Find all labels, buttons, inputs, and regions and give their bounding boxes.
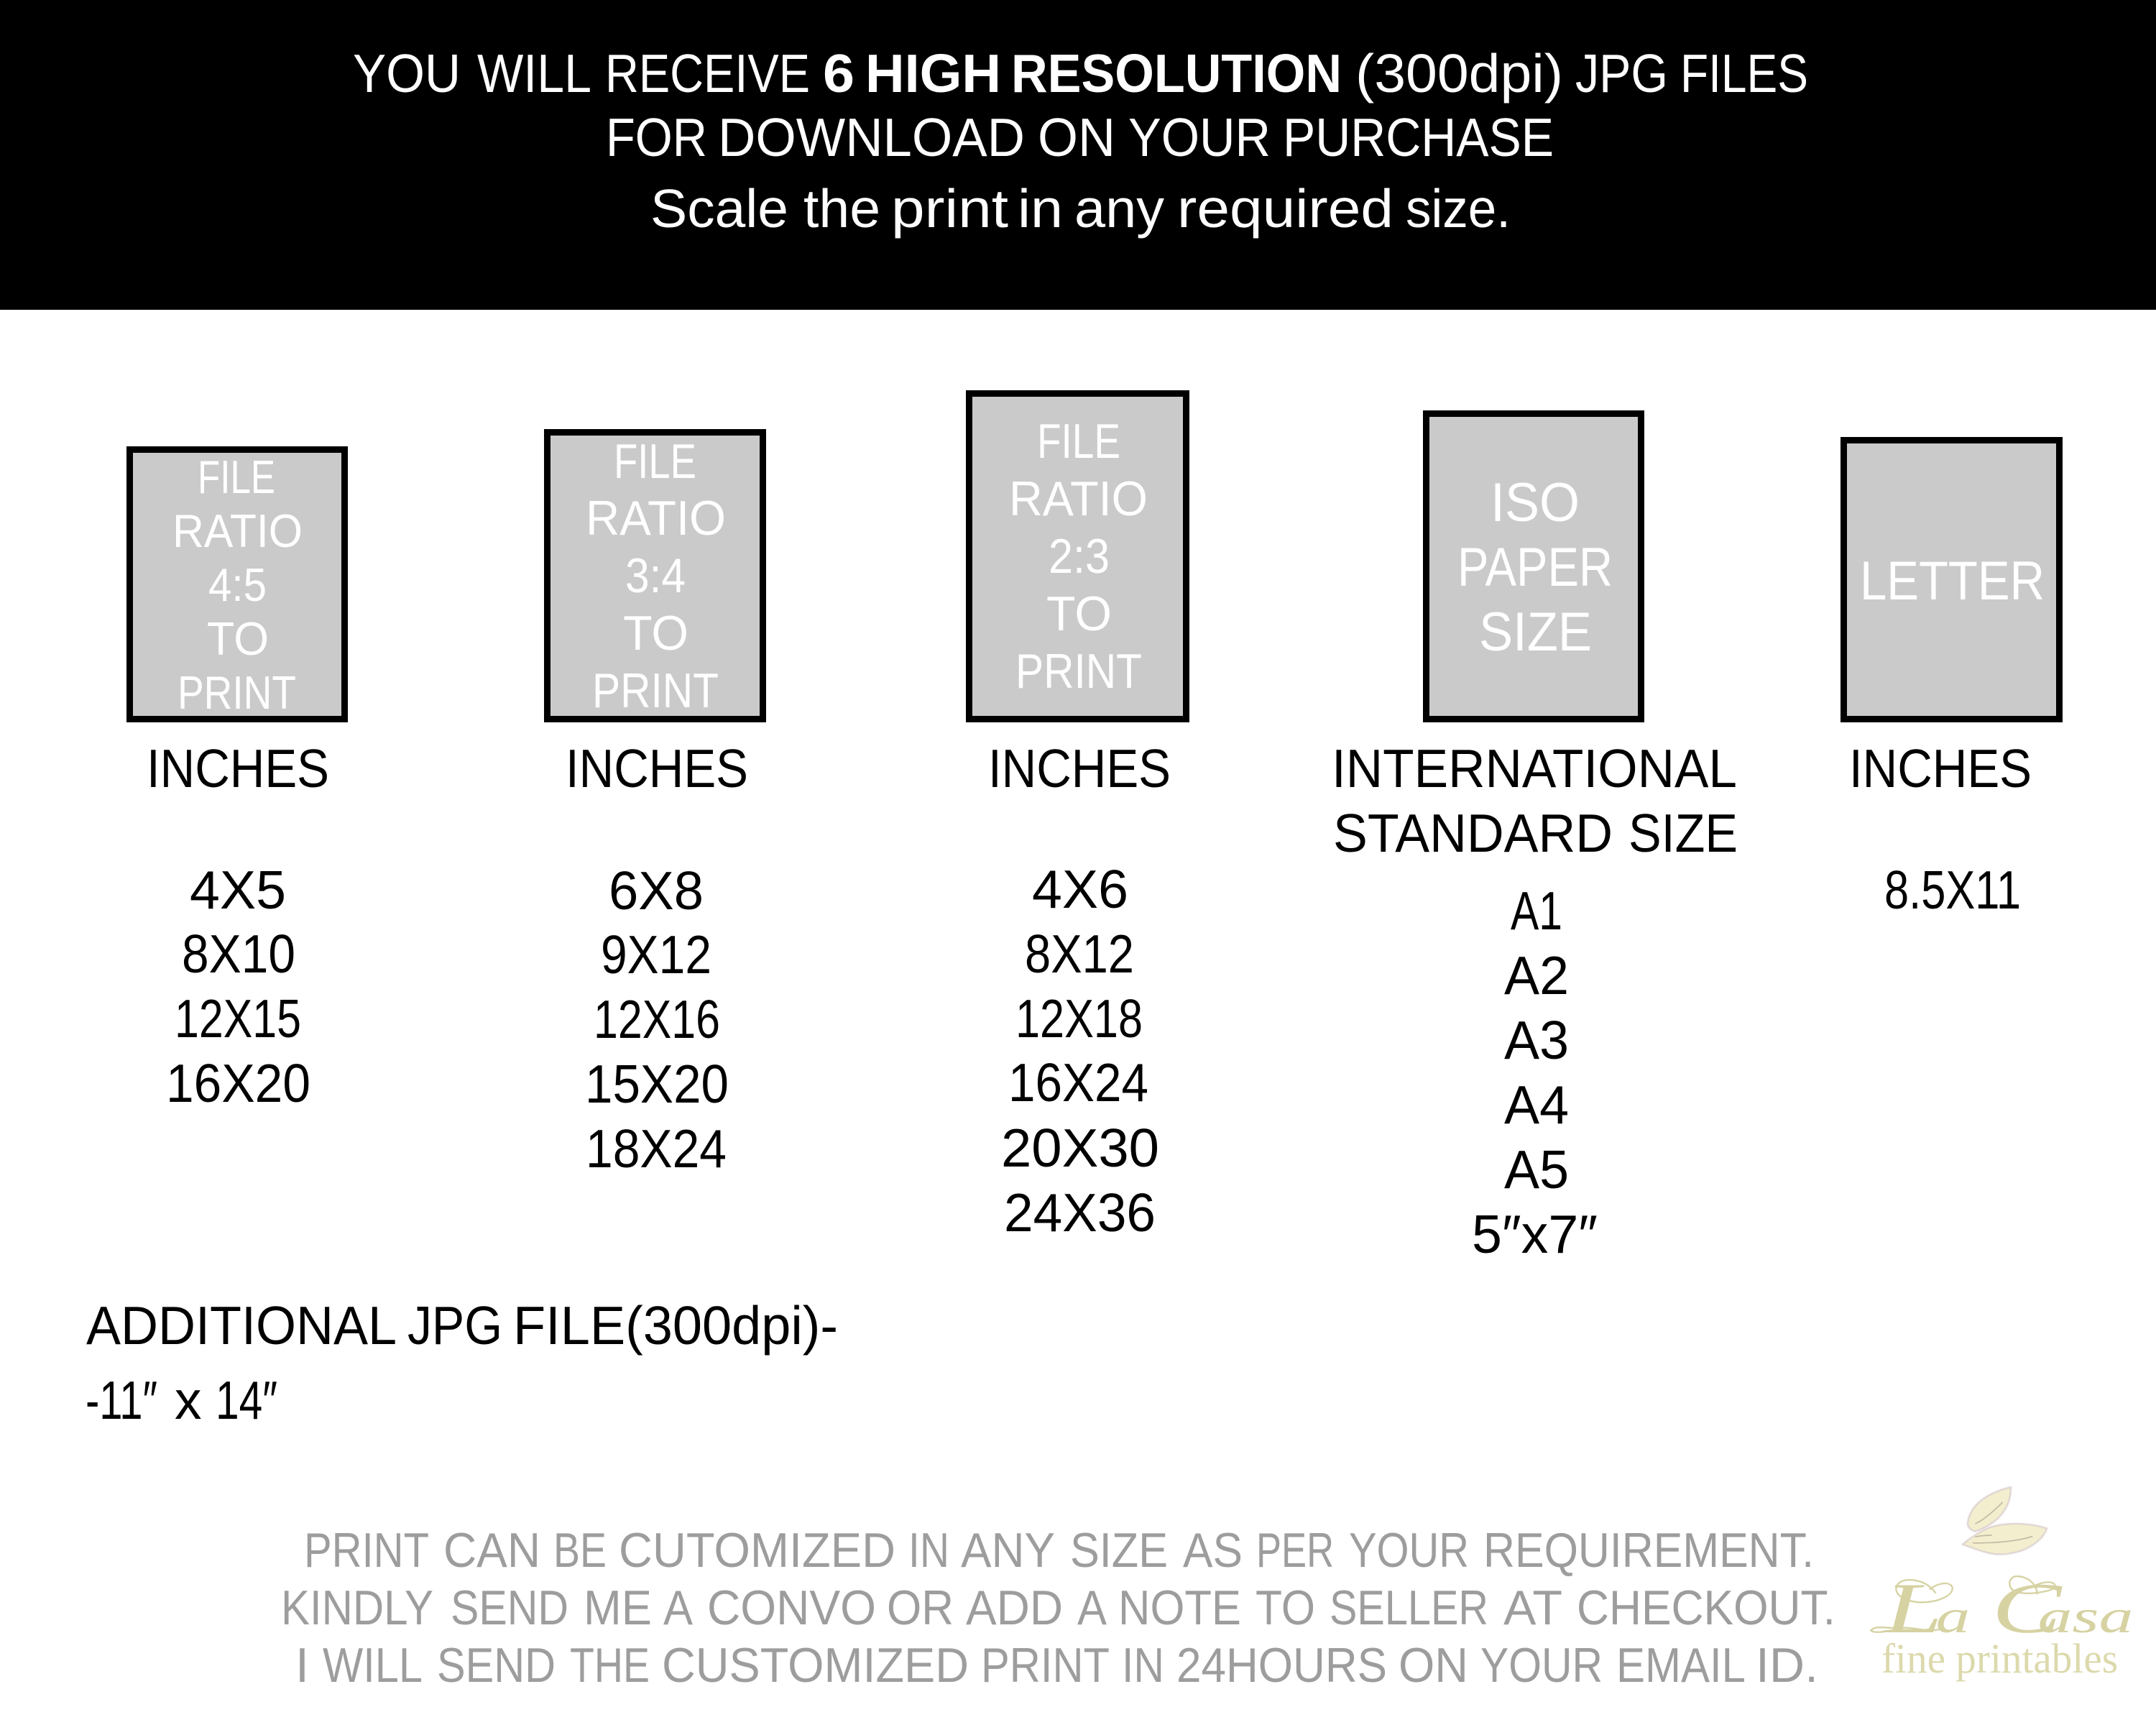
customization note: REQUIREMENT. — [1483, 1523, 1814, 1578]
panel: ISO paper size — [1332, 414, 1738, 1264]
label: file ratio 3:4: PRINT — [592, 663, 719, 718]
label: file ratio 4:5: FILE — [198, 451, 275, 503]
label: file ratio 3:4 — [586, 434, 726, 718]
header line 2: DOWNLOAD — [718, 107, 1025, 167]
customization note: CAN — [443, 1523, 540, 1578]
label: file ratio 4:5: TO — [207, 612, 269, 665]
size list 3:4: 18X24 — [586, 1118, 727, 1179]
customization note: KINDLY — [281, 1581, 433, 1635]
wordmark: La Casa: C — [1992, 1568, 2063, 1648]
header line 3: any — [1074, 178, 1165, 239]
label: file ratio 2:3: TO — [1046, 586, 1112, 641]
customization note: PER — [1256, 1523, 1334, 1578]
label: ISO paper size: PAPER — [1457, 537, 1613, 598]
additional file note: x — [175, 1370, 201, 1430]
heading: international standard size: STANDARD — [1333, 803, 1613, 863]
heading: inches: INCHES — [988, 738, 1171, 799]
header line 3 — [650, 178, 1511, 239]
customization note: SEND — [451, 1581, 568, 1635]
size list ISO: A1 — [1511, 880, 1562, 941]
size list 2:3: 8X12 — [1025, 924, 1134, 984]
panel: ratio 4:5 — [129, 450, 345, 1113]
customization note: WILL — [323, 1638, 423, 1693]
heading: international standard size — [1332, 738, 1738, 863]
header line 1: RESOLUTION — [1011, 43, 1342, 104]
label: ISO paper size — [1457, 472, 1613, 663]
size list 3:4: 15X20 — [585, 1054, 729, 1114]
size list letter: 8.5X11 — [1884, 860, 2021, 920]
header line 1: FILES — [1680, 43, 1808, 104]
label: file ratio 4:5: 4:5 — [208, 558, 267, 611]
label: file ratio 2:3: 2:3 — [1049, 529, 1110, 584]
customization note: 24HOURS — [1176, 1638, 1387, 1693]
header line 1 — [353, 43, 1808, 104]
customization note: ADD — [966, 1581, 1063, 1635]
size list ISO: 5″x7″ — [1472, 1204, 1598, 1264]
header line 1: JPG — [1575, 43, 1668, 104]
size list 2:3: 16X24 — [1008, 1052, 1148, 1113]
customization note: OR — [887, 1581, 954, 1635]
label: file ratio 2:3: PRINT — [1015, 644, 1142, 699]
size list 3:4: 9X12 — [601, 924, 711, 985]
panel: ratio 2:3 — [969, 394, 1186, 1243]
header line 1: (300dpi) — [1355, 43, 1563, 104]
size list 2:3: 4X6 — [1032, 859, 1128, 919]
label: file ratio 2:3: RATIO — [1009, 472, 1148, 526]
header line 3: required — [1177, 178, 1393, 239]
additional file note — [86, 1295, 838, 1430]
customization note: THE — [570, 1638, 650, 1693]
header line 1: WILL — [477, 43, 591, 104]
header line 1: RECEIVE — [605, 43, 810, 104]
size list 4:5 — [166, 860, 310, 1113]
label: file ratio 3:4: 3:4 — [625, 548, 686, 603]
additional file note: 14″ — [216, 1370, 277, 1430]
size list ISO — [1472, 880, 1598, 1264]
header line 3: in — [1018, 178, 1063, 239]
customization note: IN — [1122, 1638, 1164, 1693]
header line 1: YOU — [353, 43, 461, 104]
panel: letter — [1844, 440, 2060, 920]
label: ISO paper size: ISO — [1491, 472, 1580, 533]
header line 3: Scale — [650, 178, 788, 239]
size list ISO: A3 — [1504, 1010, 1569, 1070]
customization note: ANY — [961, 1523, 1055, 1578]
size list 4:5: 4X5 — [190, 860, 286, 920]
size list ISO: A2 — [1504, 945, 1569, 1006]
heading: international standard size: SIZE — [1628, 803, 1738, 863]
size list 3:4: 6X8 — [609, 860, 704, 921]
frame 3:4 — [548, 433, 763, 719]
icon: leaves — [1964, 1489, 2046, 1553]
size list 4:5: 16X20 — [166, 1053, 310, 1113]
label: letter: LETTER — [1860, 551, 2045, 612]
label: file ratio 4:5: RATIO — [172, 505, 303, 557]
additional file note: ADDITIONAL — [86, 1295, 397, 1356]
frame ISO — [1426, 414, 1641, 719]
customization note: PRINT — [304, 1523, 429, 1578]
customization note: AT — [1503, 1581, 1562, 1635]
size list ISO: A4 — [1504, 1075, 1569, 1135]
customization note: BE — [553, 1523, 607, 1578]
size list 3:4: 12X16 — [594, 989, 720, 1049]
frame 4:5 — [129, 450, 345, 719]
label: file ratio 4:5: PRINT — [178, 666, 296, 719]
size list 3:4 — [585, 860, 729, 1179]
label: file ratio 2:3: FILE — [1037, 414, 1120, 469]
customization note: CUTOMIZED — [619, 1523, 895, 1578]
customization note: YOUR — [1480, 1638, 1603, 1693]
label: file ratio 3:4: FILE — [614, 434, 696, 489]
size list ISO: A5 — [1504, 1139, 1569, 1200]
customization note: AS — [1183, 1523, 1243, 1578]
heading: international standard size: INTERNATIONAL — [1332, 738, 1737, 799]
label: file ratio 3:4: TO — [623, 606, 688, 661]
label: file ratio 4:5 — [172, 451, 303, 719]
wordmark: La Casa — [1871, 1568, 2133, 1648]
header line 1: 6 — [823, 43, 854, 104]
additional file note: -11″ — [86, 1370, 157, 1430]
size list 2:3: 20X30 — [1001, 1118, 1159, 1178]
customization note: ID. — [1756, 1638, 1818, 1693]
customization note: A — [663, 1581, 694, 1635]
header line 3: print — [891, 178, 1008, 239]
header line 2: ON — [1038, 107, 1115, 167]
header line 1: HIGH — [865, 43, 1001, 104]
customization note: SEND — [437, 1638, 556, 1693]
decorative swashes — [1871, 1576, 2055, 1632]
customization note: TO — [1256, 1581, 1315, 1635]
customization note: CONVO — [707, 1581, 876, 1635]
additional file note: FILE(300dpi)- — [513, 1295, 838, 1356]
panel: ratio 3:4 — [548, 433, 763, 1179]
heading: inches: INCHES — [147, 738, 329, 799]
customization note: PRINT — [981, 1638, 1110, 1693]
size list 2:3: 24X36 — [1004, 1182, 1156, 1243]
header line 3: the — [803, 178, 880, 239]
customization note: SELLER — [1330, 1581, 1488, 1635]
frame letter — [1844, 440, 2060, 719]
label: ISO paper size: SIZE — [1479, 602, 1592, 663]
label: file ratio 3:4: RATIO — [586, 491, 726, 546]
header line 2: YOUR — [1128, 107, 1271, 167]
customization note: NOTE — [1118, 1581, 1241, 1635]
wordmark: La Casa: a — [1935, 1590, 1970, 1642]
customization note: ON — [1399, 1638, 1468, 1693]
size list 4:5: 12X15 — [175, 988, 301, 1049]
header line 2 — [606, 107, 1554, 167]
header line 2: FOR — [606, 107, 707, 167]
customization note: YOUR — [1349, 1523, 1469, 1578]
label: file ratio 2:3 — [1009, 414, 1148, 699]
customization note: CUSTOMIZED — [662, 1638, 969, 1693]
logo: La Casa fine printables — [1871, 1489, 2133, 1682]
tagline: fine printables: fine printables — [1881, 1635, 2118, 1682]
header line 2: PURCHASE — [1283, 107, 1554, 167]
additional file note: JPG — [407, 1295, 502, 1356]
customization note — [281, 1523, 1835, 1693]
header line 3: size. — [1406, 178, 1511, 239]
customization note: A — [1077, 1581, 1107, 1635]
customization note: I — [295, 1638, 309, 1693]
customization note: EMAIL — [1616, 1638, 1746, 1693]
size list 2:3 — [1001, 859, 1159, 1243]
frame 2:3 — [969, 394, 1186, 719]
header banner — [0, 0, 2156, 310]
wordmark: La Casa: asa — [2037, 1590, 2133, 1642]
customization note: CHECKOUT. — [1577, 1581, 1835, 1635]
customization note: IN — [908, 1523, 949, 1578]
heading: inches: INCHES — [1849, 738, 2032, 799]
size list 4:5: 8X10 — [182, 924, 295, 984]
heading: inches: INCHES — [566, 738, 748, 799]
customization note: ME — [584, 1581, 652, 1635]
size list 2:3: 12X18 — [1015, 988, 1143, 1049]
customization note: SIZE — [1070, 1523, 1168, 1578]
wordmark: La Casa: L — [1883, 1568, 1943, 1648]
